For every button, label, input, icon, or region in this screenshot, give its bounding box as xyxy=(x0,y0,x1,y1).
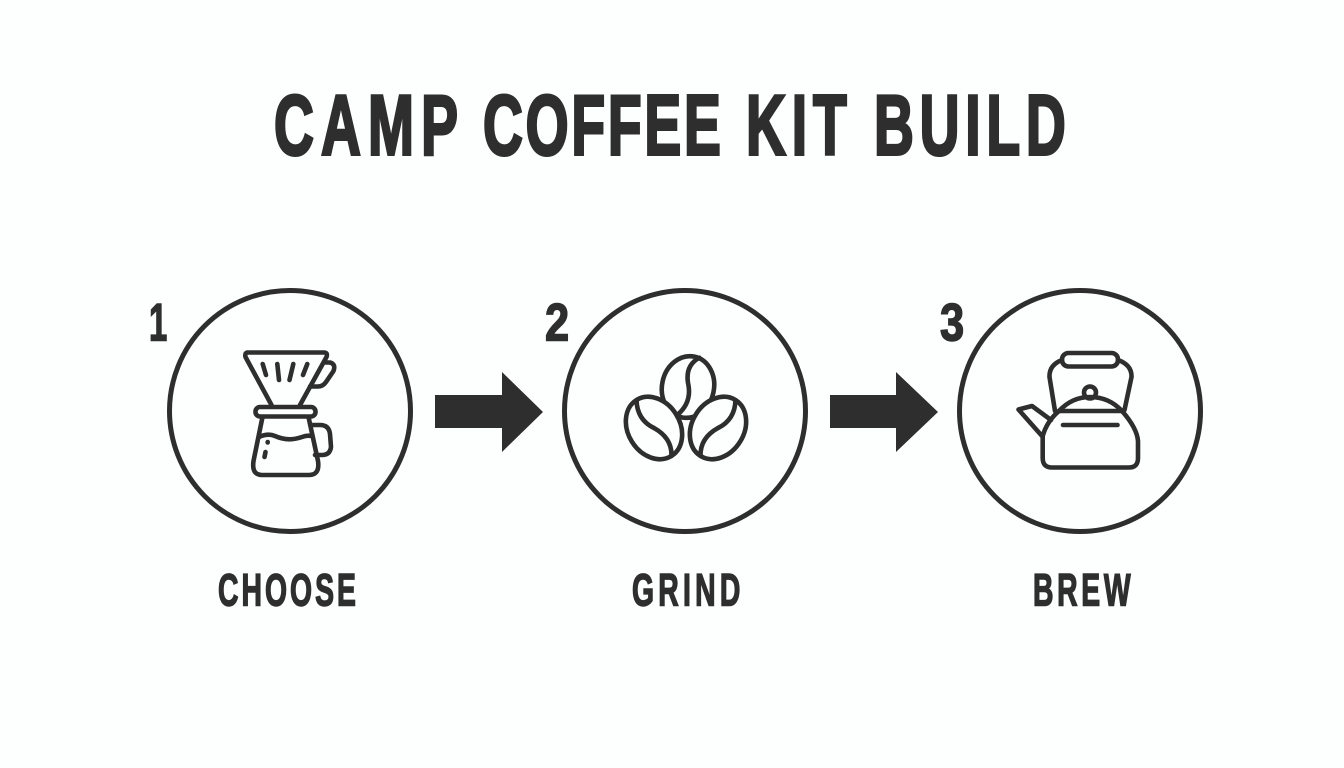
step 1: choose xyxy=(149,290,410,615)
title: COFFEE xyxy=(483,79,721,173)
label: choose: CHOOSE xyxy=(218,565,356,615)
title xyxy=(274,79,1066,173)
icon: camp kettle xyxy=(1018,353,1138,468)
icon: coffee beans xyxy=(614,351,758,470)
label: brew: BREW xyxy=(1033,565,1131,615)
step 3 circle xyxy=(960,290,1200,532)
title: KIT xyxy=(746,79,847,173)
step 3: brew xyxy=(940,290,1200,615)
step number 3: 3 xyxy=(940,293,964,353)
step 1 circle xyxy=(170,290,410,532)
step number 1: 1 xyxy=(149,294,167,353)
icon: pour-over dripper and carafe xyxy=(245,352,334,475)
arrow 1 to 2 xyxy=(435,372,543,452)
label: grind: GRIND xyxy=(632,565,740,615)
arrow 2 to 3 xyxy=(830,372,938,452)
title: BUILD xyxy=(874,79,1066,173)
title: CAMP xyxy=(274,79,458,173)
step 2 circle xyxy=(564,290,806,532)
step number 2: 2 xyxy=(545,293,569,353)
step 2: grind xyxy=(545,290,806,615)
